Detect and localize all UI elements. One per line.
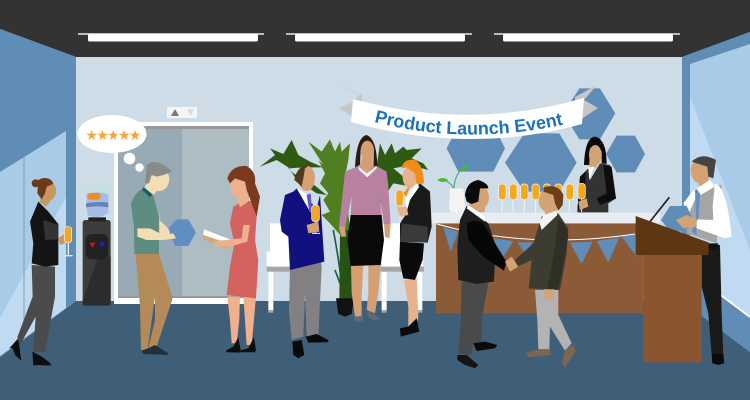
floor bbox=[0, 301, 750, 400]
potted palm plant bbox=[260, 139, 428, 317]
banner bbox=[339, 85, 598, 139]
ceiling bbox=[0, 0, 750, 57]
vase with plant bbox=[437, 166, 468, 213]
thought bubble with five stars bbox=[78, 115, 146, 172]
speaker at podium bbox=[661, 156, 732, 365]
bunting bbox=[437, 224, 637, 264]
elevator bbox=[114, 122, 253, 304]
man with gray hair holding hexagon bbox=[131, 162, 196, 355]
left wall with glass bbox=[0, 29, 76, 357]
banner title: Product Launch Event bbox=[375, 110, 564, 135]
ceiling lights bbox=[78, 33, 680, 42]
back wall bbox=[70, 50, 690, 310]
drink counter bbox=[432, 166, 660, 313]
banner tails bbox=[338, 85, 598, 120]
podium with microphone bbox=[636, 197, 709, 362]
bartender bbox=[577, 137, 616, 212]
man in olive jacket shaking hands bbox=[505, 186, 576, 367]
man in black suit shaking hands bbox=[457, 180, 507, 368]
water cooler bbox=[83, 186, 111, 306]
right wall with window bbox=[682, 32, 750, 352]
white chairs bbox=[267, 223, 424, 313]
elevator indicator bbox=[167, 107, 197, 118]
wall hexagons bbox=[447, 88, 645, 192]
man in blue blazer bbox=[280, 163, 328, 358]
champagne glasses bbox=[499, 183, 588, 212]
woman with drink bbox=[9, 178, 73, 366]
woman with orange hair bbox=[396, 160, 432, 337]
rating stars: ★★★★★ bbox=[85, 128, 141, 144]
woman in pink sweater bbox=[339, 135, 391, 322]
woman in red dress reading bbox=[203, 166, 260, 353]
